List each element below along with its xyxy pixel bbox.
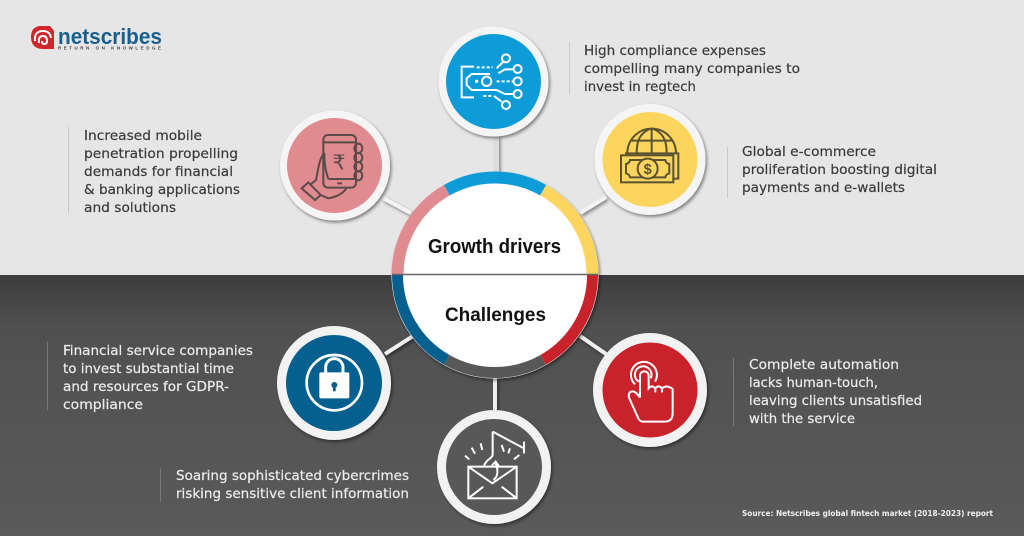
icon: padlock [307, 355, 362, 410]
connector: yellow [580, 197, 606, 213]
connector: blue [495, 136, 499, 172]
node: GDPR lock circle [277, 326, 391, 440]
source note: Source: Netscribes global fintech market (2018-2023) report [742, 509, 993, 518]
logo wordmark: netscribes [58, 24, 162, 49]
panel: challenges background [0, 275, 1024, 536]
text: mobile penetration: and solutions [84, 200, 176, 216]
text: GDPR compliance: to invest substantial time [63, 361, 234, 377]
hub ring: yellow segment [543, 190, 592, 275]
text: mobile penetration: Increased mobile [84, 128, 202, 144]
logo tagline: RETURN ON KNOWLEDGE [58, 46, 161, 50]
hub ring: red segment [543, 275, 592, 360]
text: compliance expenses: High compliance expenses [584, 43, 766, 59]
heading: growth drivers: Growth drivers [428, 236, 561, 258]
text: e-commerce: Global e-commerce [742, 144, 876, 160]
text: GDPR compliance: compliance [63, 397, 143, 413]
text: automation: lacks human-touch, [749, 375, 878, 391]
heading: challenges: Challenges [445, 305, 546, 326]
text: GDPR compliance: and resources for GDPR- [63, 379, 229, 395]
connector: envelope [493, 377, 497, 412]
connector: lock [385, 336, 413, 354]
text: e-commerce: payments and e-wallets [742, 180, 905, 196]
panel: growth drivers background [0, 0, 1024, 275]
text: cybercrimes: Soaring sophisticated cybercrimes [176, 468, 409, 484]
text: automation [734, 357, 922, 427]
node: automation red circle [593, 333, 707, 447]
hub ring: dark blue segment [398, 275, 447, 360]
text: mobile penetration: & banking applications [84, 182, 240, 198]
node: cybercrime envelope circle [437, 410, 551, 524]
node: e-commerce yellow circle [594, 104, 706, 215]
text: e-commerce: proliferation boosting digital [742, 162, 937, 178]
hub ring: blue segment [447, 177, 543, 190]
text: compliance expenses: compelling many companies to [584, 61, 800, 77]
text: compliance expenses: invest in regtech [584, 79, 696, 95]
logo: netscribes [31, 24, 162, 50]
text: mobile penetration: demands for financial [84, 164, 233, 180]
dollar sign: $ [644, 162, 652, 178]
text: automation: leaving clients unsatisfied [749, 393, 922, 409]
hub ring: grey segment [447, 360, 543, 373]
icon: digital banknote circuit [462, 54, 522, 109]
hub ring: pink segment [398, 190, 447, 275]
rupee symbol: ₹ [332, 150, 346, 174]
icon: touch hand [629, 362, 673, 422]
node: regtech blue circle [438, 26, 548, 136]
text: mobile penetration [68, 127, 240, 216]
text: GDPR compliance: Financial service companies [63, 343, 253, 359]
central hub [392, 172, 598, 378]
connector: pink [383, 198, 411, 213]
text: automation: with the service [749, 411, 855, 427]
text: GDPR compliance [48, 342, 253, 413]
text: automation: Complete automation [749, 357, 899, 373]
text: e-commerce [728, 144, 937, 198]
icon: phishing envelope [465, 432, 524, 498]
text: cybercrimes [160, 468, 409, 502]
text: cybercrimes: risking sensitive client information [176, 486, 409, 502]
connector: hand [580, 336, 606, 354]
text: compliance expenses [570, 42, 800, 95]
icon: logo mark [31, 26, 54, 49]
text: mobile penetration: penetration propelling [84, 146, 238, 162]
node: mobile pink circle [280, 110, 390, 220]
